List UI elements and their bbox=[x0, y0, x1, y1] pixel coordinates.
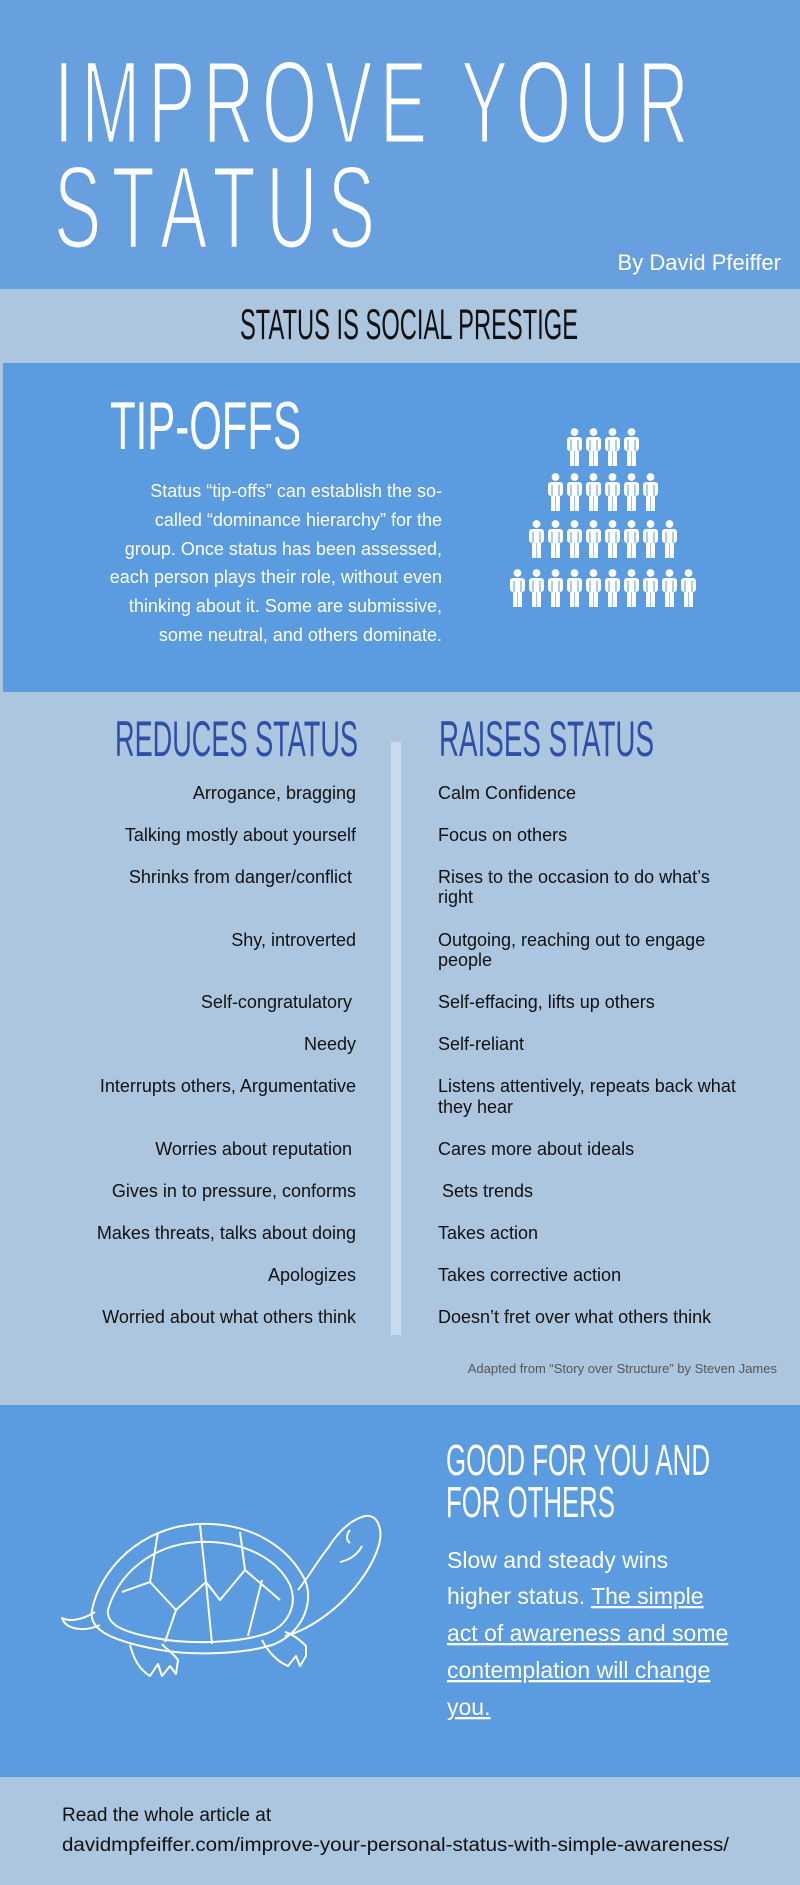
list: raises status items: Self-reliant bbox=[438, 1034, 524, 1054]
title bbox=[54, 36, 689, 273]
list: raises status items: Self-effacing, lifts up others bbox=[438, 992, 655, 1012]
list: raises status items: Takes action bbox=[438, 1223, 538, 1243]
list: raises status items: Cares more about ideals bbox=[438, 1139, 634, 1159]
list: reduces status items: Worried about what others think bbox=[102, 1307, 357, 1327]
list: raises status items: Listens attentively, repeats back what bbox=[438, 1076, 736, 1096]
list: reduces status items: Interrupts others, Argumentative bbox=[100, 1076, 356, 1096]
list: raises status items bbox=[438, 783, 736, 1327]
list: raises status items: Doesn’t fret over what others think bbox=[438, 1307, 712, 1327]
heading: good for you and for others: FOR OTHERS bbox=[446, 1478, 615, 1527]
list: reduces status items: Arrogance, bragging bbox=[193, 783, 356, 803]
list: raises status items: Calm Confidence bbox=[438, 783, 576, 803]
list: raises status items: Takes corrective action bbox=[438, 1265, 621, 1285]
list: reduces status items bbox=[97, 783, 357, 1327]
list: raises status items: people bbox=[438, 950, 492, 970]
text block: tip-offs description: thinking about it. Some are submissive, bbox=[129, 596, 442, 616]
list: reduces status items: Apologizes bbox=[268, 1265, 356, 1285]
list: raises status items: they hear bbox=[438, 1097, 513, 1117]
list: reduces status items: Gives in to pressure, conforms bbox=[112, 1181, 356, 1201]
footer: Read the whole article at bbox=[62, 1805, 272, 1826]
list: reduces status items: Shrinks from danger/conflict bbox=[129, 867, 352, 887]
text block: slow and steady: act of awareness and some bbox=[447, 1620, 728, 1646]
heading: reduces status: REDUCES STATUS bbox=[115, 711, 358, 767]
text block: slow and steady: higher status. The simple bbox=[447, 1583, 704, 1609]
list: raises status items: Rises to the occasion to do what’s bbox=[438, 867, 710, 887]
list: raises status items: Focus on others bbox=[438, 825, 567, 845]
banner: status is social prestige bbox=[0, 289, 800, 363]
credit: Adapted from “Story over Structure” by Steven James bbox=[468, 1361, 777, 1376]
panel: reduces vs raises status bbox=[0, 692, 800, 1405]
text block: tip-offs description: Status “tip-offs” can establish the so- bbox=[150, 481, 442, 501]
text block: tip-offs description: some neutral, and others dominate. bbox=[159, 625, 442, 645]
panel: good for you and for others bbox=[0, 1405, 800, 1777]
heading: good for you and for others bbox=[446, 1436, 710, 1527]
list: reduces status items: Makes threats, talks about doing bbox=[97, 1223, 356, 1243]
header panel bbox=[0, 0, 800, 289]
list: reduces status items: Needy bbox=[304, 1034, 356, 1054]
footer: davidmpfeiffer.com/improve-your-personal-status-with-simple-awareness/ bbox=[62, 1835, 730, 1856]
title: IMPROVE YOUR bbox=[54, 36, 689, 168]
icon: people pyramid bbox=[510, 428, 696, 607]
list: raises status items: Outgoing, reaching out to engage bbox=[438, 930, 705, 950]
list: raises status items: right bbox=[438, 887, 473, 907]
text block: tip-offs description: group. Once status has been assessed, bbox=[125, 539, 442, 559]
panel: tip-offs bbox=[3, 363, 800, 692]
list: reduces status items: Self-congratulatory bbox=[201, 992, 352, 1012]
list: reduces status items: Worries about reputation bbox=[155, 1139, 352, 1159]
icon: turtle bbox=[62, 1516, 380, 1676]
footer bbox=[0, 1777, 800, 1885]
text block: slow and steady: you. bbox=[447, 1694, 490, 1720]
text block: slow and steady: Slow and steady wins bbox=[447, 1547, 668, 1573]
text block: slow and steady: contemplation will change bbox=[447, 1657, 710, 1683]
divider bar bbox=[391, 742, 401, 1335]
text block: slow and steady bbox=[447, 1547, 728, 1720]
text block: tip-offs description: called “dominance hierarchy” for the bbox=[155, 510, 442, 530]
heading: tip-offs: TIP-OFFS bbox=[110, 388, 301, 464]
title: STATUS bbox=[54, 141, 375, 273]
list: reduces status items: Talking mostly about yourself bbox=[125, 825, 357, 845]
text block: tip-offs description bbox=[110, 481, 442, 645]
byline: By David Pfeiffer bbox=[618, 250, 781, 275]
list: reduces status items: Shy, introverted bbox=[231, 930, 356, 950]
text block: tip-offs description: each person plays their role, without even bbox=[110, 567, 442, 587]
list: raises status items: Sets trends bbox=[442, 1181, 533, 1201]
